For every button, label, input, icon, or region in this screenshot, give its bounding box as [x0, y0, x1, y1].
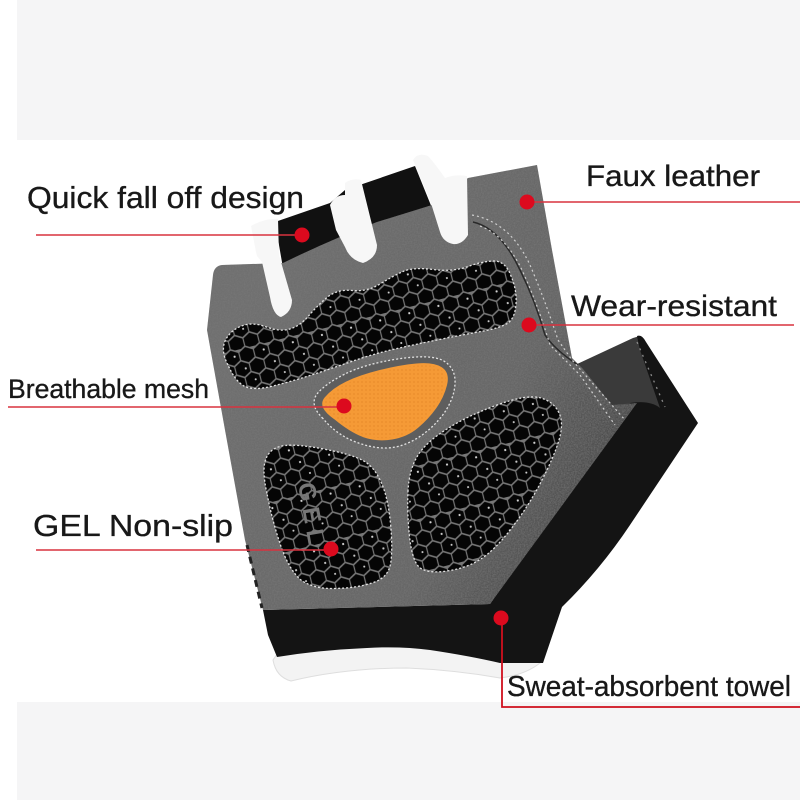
white finger loop 3	[413, 155, 468, 244]
grey palm	[207, 165, 637, 610]
left edge stripes	[247, 545, 262, 608]
callout: GEL Non-slip: GEL Non-slip	[33, 508, 233, 543]
callout: Sweat-absorbent towel	[494, 610, 800, 707]
callout: Quick fall off design: Quick fall off design	[27, 180, 304, 215]
orange breathable mesh	[323, 364, 447, 439]
mesh pad: lower left with GEL mark: GEL	[292, 480, 329, 546]
white finger loop 1	[251, 219, 292, 317]
bottom grey band	[17, 702, 800, 800]
callout: Breathable mesh: Breathable mesh	[8, 374, 209, 404]
white finger loop 2	[330, 179, 377, 263]
black band between fingers	[275, 166, 432, 268]
black towel strap	[263, 336, 698, 663]
orange pad surround	[314, 357, 455, 448]
callout: Faux leather	[520, 160, 800, 210]
mesh pad: lower left with GEL mark	[264, 445, 392, 589]
thumb edge stitching	[637, 342, 665, 407]
callout: Faux leather: Faux leather	[586, 160, 760, 193]
callout: Breathable mesh	[8, 374, 352, 414]
callout: Wear-resistant: Wear-resistant	[571, 290, 778, 323]
glove illustration	[207, 155, 698, 681]
top grey band	[17, 0, 800, 140]
callout: Sweat-absorbent towel: Sweat-absorbent towel	[507, 671, 791, 703]
callout: GEL Non-slip	[33, 508, 338, 556]
mesh pad: lower right	[408, 397, 562, 572]
palm stitching	[472, 215, 625, 425]
mesh pad: top	[223, 261, 516, 388]
white wrist binding	[273, 640, 540, 681]
palm seam	[473, 222, 578, 365]
thumb dark panel	[575, 336, 670, 440]
callout: Wear-resistant	[522, 290, 794, 332]
callout: Quick fall off design	[27, 180, 310, 242]
